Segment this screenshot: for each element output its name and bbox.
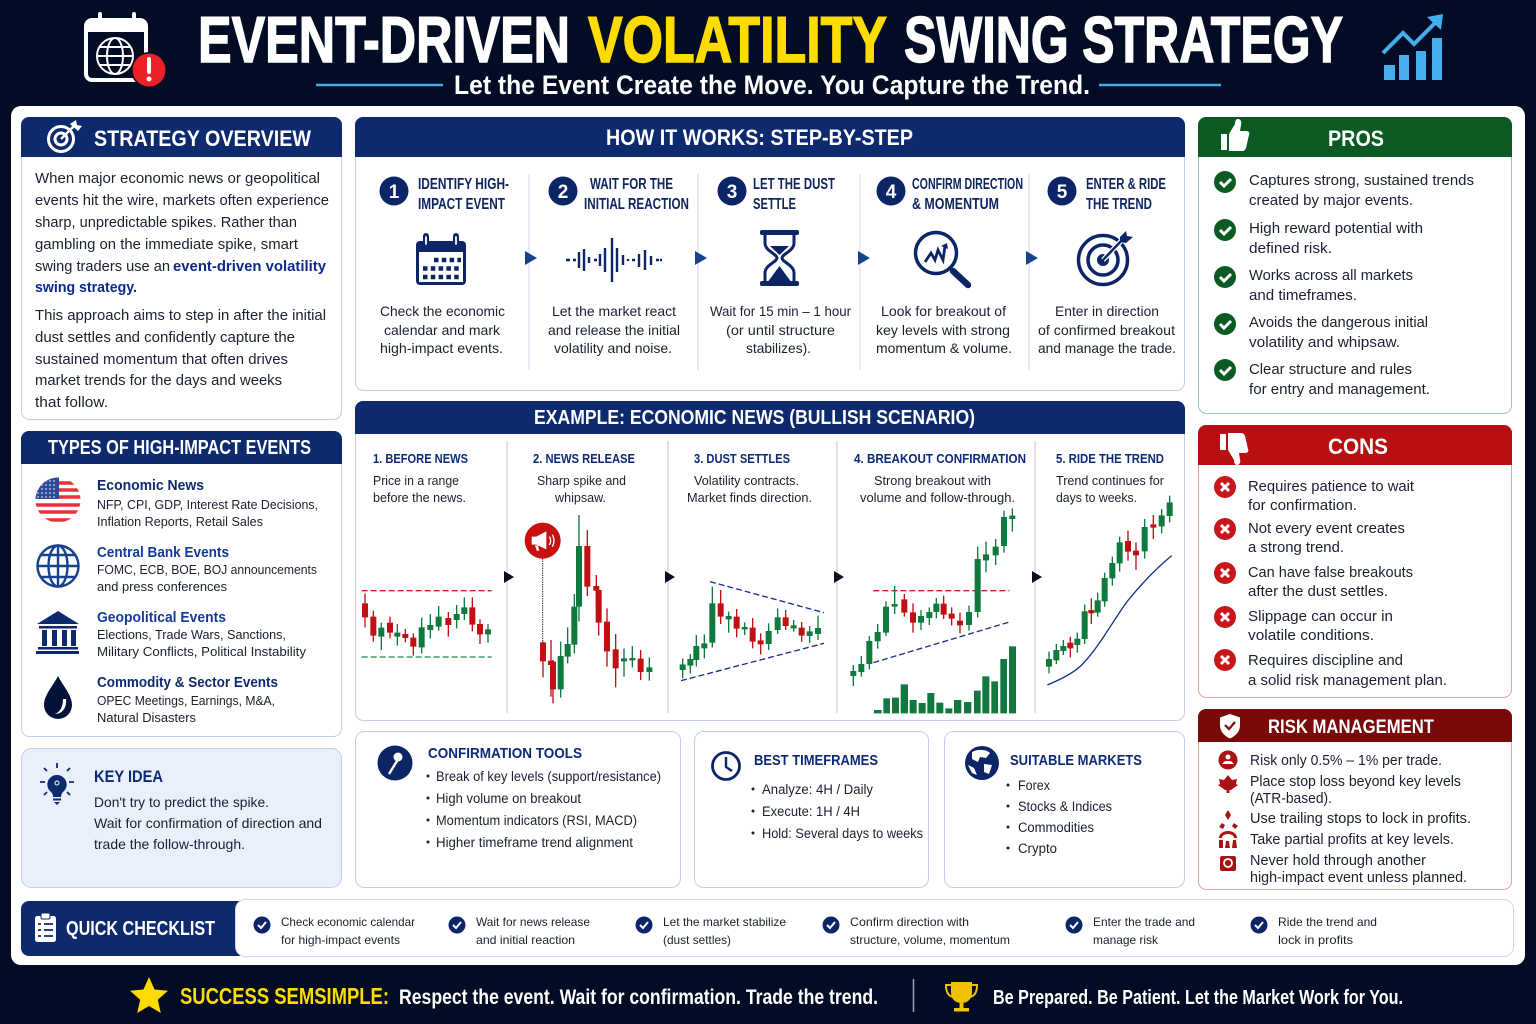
stage 3: 3. DUST SETTLES <box>694 452 790 466</box>
overview text: sustained momentum that often drives <box>35 351 288 368</box>
overview text: dust settles and confidently capture the <box>35 329 295 346</box>
list: Stocks & Indices <box>1018 799 1112 814</box>
pros checks <box>1214 171 1236 381</box>
list <box>752 782 923 841</box>
checklist items: Let the market stabilize <box>663 915 786 929</box>
item: economic news: NFP, CPI, GDP, Interest Rate Decisions, <box>97 498 318 512</box>
key idea text: trade the follow-through. <box>94 836 245 852</box>
stage 5: days to weeks. <box>1056 491 1137 505</box>
icon: oil drop <box>44 676 72 719</box>
title: EVENT-DRIVEN <box>198 3 570 76</box>
stage 2 <box>525 452 649 703</box>
cons list: Not every event creates <box>1248 520 1405 537</box>
cons list: Requires discipline and <box>1248 652 1403 669</box>
risk list: Use trailing stops to lock in profits. <box>1250 811 1471 827</box>
volume bars <box>874 646 1016 713</box>
list: Crypto <box>1018 841 1057 856</box>
list <box>426 769 661 850</box>
heading: RISK MANAGEMENT <box>1268 716 1434 738</box>
checklist items: and initial reaction <box>476 933 575 947</box>
arrow <box>695 251 707 265</box>
stage 2: 2. NEWS RELEASE <box>533 452 635 466</box>
closing message: Be Prepared. Be Patient. Let the Market Work for You. <box>993 987 1403 1009</box>
item: commodity and sector events: Commodity & Sector Events <box>97 675 278 691</box>
item: commodity and sector events: Natural Disasters <box>97 711 196 725</box>
step 1: high-impact events. <box>380 340 503 356</box>
overview text: events hit the wire, markets often experience <box>35 192 329 209</box>
checklist items <box>281 915 1377 947</box>
risk list: Take partial profits at key levels. <box>1250 832 1454 848</box>
icon: globe <box>38 545 78 586</box>
step 2: INITIAL REACTION <box>584 196 689 213</box>
icon: target <box>48 120 82 152</box>
panel: confirmation tools <box>356 732 680 888</box>
icon: star <box>130 977 168 1013</box>
subtitle: Let the Event Create the Move. You Capture the Trend. <box>454 70 1090 100</box>
candlestick chart: range <box>362 591 492 657</box>
stage 2: Sharp spike and <box>537 474 626 488</box>
panel: quick checklist <box>21 900 1514 956</box>
overview text: market trends for the days and weeks <box>35 372 282 389</box>
risk list: Risk only 0.5% – 1% per trade. <box>1250 753 1442 769</box>
item: central bank events: and press conferences <box>97 580 227 594</box>
overview text <box>35 170 329 411</box>
icon: trophy <box>946 982 977 1012</box>
overview text: gambling on the immediate spike, smart <box>35 236 299 253</box>
pros list <box>1249 172 1474 398</box>
risk icons <box>1218 750 1238 871</box>
arrow <box>665 571 675 583</box>
pros list: Works across all markets <box>1249 267 1413 284</box>
step 2: WAIT FOR THE <box>590 176 673 193</box>
item: economic news: Economic News <box>97 478 204 494</box>
list: Higher timeframe trend alignment <box>436 835 633 850</box>
item: central bank events: FOMC, ECB, BOE, BOJ announcements <box>97 563 317 577</box>
stage 1: Price in a range <box>373 474 459 488</box>
cons list: volatile conditions. <box>1248 627 1374 644</box>
step 1: IMPACT EVENT <box>418 196 505 213</box>
step 4: key levels with strong <box>876 322 1010 338</box>
cons marks <box>1214 476 1236 671</box>
cons list: Slippage can occur in <box>1248 608 1393 625</box>
step 3: 3 <box>727 182 737 203</box>
panel: key idea <box>22 748 342 888</box>
success message: Respect the event. Wait for confirmation. Trade the trend. <box>399 986 878 1009</box>
stage 5: Trend continues for <box>1056 474 1164 488</box>
icon: us flag <box>35 477 81 523</box>
cons list: a strong trend. <box>1248 539 1344 556</box>
heading: CONFIRMATION TOOLS <box>428 745 582 762</box>
stage 1: before the news. <box>373 491 466 505</box>
heading: BEST TIMEFRAMES <box>754 752 878 769</box>
pros list: High reward potential with <box>1249 220 1423 237</box>
overview text: swing traders use an <box>35 258 170 275</box>
checklist items: lock in profits <box>1278 933 1353 947</box>
icon: hourglass <box>760 230 799 286</box>
step 2 <box>548 176 689 356</box>
icon: thumbs down <box>1220 433 1248 465</box>
cons list: a solid risk management plan. <box>1248 672 1447 689</box>
step 2: Let the market react <box>552 303 676 319</box>
pros list: created by major events. <box>1249 192 1413 209</box>
arrow <box>1032 571 1042 583</box>
list: High volume on breakout <box>436 791 581 806</box>
item: central bank events: Central Bank Events <box>97 545 229 561</box>
step 2: 2 <box>558 182 568 203</box>
step 3 <box>710 176 851 356</box>
item: geopolitical events <box>97 610 307 659</box>
pros list: Avoids the dangerous initial <box>1249 314 1428 331</box>
checklist items: manage risk <box>1093 933 1159 947</box>
heading: KEY IDEA <box>94 768 163 786</box>
list: Execute: 1H / 4H <box>762 804 860 819</box>
key idea text <box>94 794 322 852</box>
overview text: event-driven volatility <box>173 258 327 275</box>
step 5: THE TREND <box>1086 196 1152 213</box>
icon: thumbs up <box>1221 119 1249 151</box>
icon: pointer badge <box>378 746 412 780</box>
panel: pros <box>1198 117 1512 414</box>
checklist items: (dust settles) <box>663 933 731 947</box>
step 1: IDENTIFY HIGH- <box>418 176 509 193</box>
step 5: of confirmed breakout <box>1038 322 1175 338</box>
step 1: 1 <box>389 182 400 203</box>
risk list: high-impact event unless planned. <box>1250 870 1467 886</box>
pros list: for entry and management. <box>1249 381 1430 398</box>
heading: CONS <box>1328 434 1388 459</box>
step 3: Wait for 15 min – 1 hour <box>710 303 851 319</box>
icon: target with arrow <box>1078 231 1133 284</box>
checklist items: for high-impact events <box>281 933 400 947</box>
panel: types of high-impact events <box>21 431 342 736</box>
stage 4: 4. BREAKOUT CONFIRMATION <box>854 452 1026 466</box>
success message <box>180 983 878 1009</box>
icon: calendar <box>416 236 466 285</box>
heading: PROS <box>1328 126 1384 151</box>
stage 3: Market finds direction. <box>687 491 812 505</box>
step 4 <box>876 176 1023 356</box>
stage 2: whipsaw. <box>554 491 606 505</box>
step 5: Enter in direction <box>1055 303 1159 319</box>
step 3: SETTLE <box>753 196 796 213</box>
footer <box>130 977 1403 1013</box>
panel: how it works <box>355 117 1185 390</box>
step 4: CONFIRM DIRECTION <box>912 176 1023 193</box>
heading: SUITABLE MARKETS <box>1010 752 1142 769</box>
checklist items: structure, volume, momentum <box>850 933 1010 947</box>
checklist marks <box>254 916 1268 934</box>
panel: best timeframes <box>694 732 928 888</box>
pros list: and timeframes. <box>1249 287 1357 304</box>
checklist items: Enter the trade and <box>1093 915 1195 929</box>
header banner <box>86 3 1443 100</box>
cons list: Can have false breakouts <box>1248 564 1413 581</box>
step 4: & MOMENTUM <box>912 196 999 213</box>
success message: SUCCESS SEMSIMPLE: <box>180 983 389 1009</box>
step 3: (or until structure <box>726 322 835 338</box>
panel: bullish scenario example <box>355 401 1185 720</box>
heading: STRATEGY OVERVIEW <box>94 126 311 151</box>
heading: EXAMPLE: ECONOMIC NEWS (BULLISH SCENARIO) <box>534 407 975 429</box>
risk list: Place stop loss beyond key levels <box>1250 774 1461 790</box>
list: Analyze: 4H / Daily <box>762 782 873 797</box>
icon: sound wave <box>566 238 662 282</box>
candlestick chart with volume <box>853 508 1016 713</box>
pros list: Captures strong, sustained trends <box>1249 172 1474 189</box>
risk list <box>1250 753 1471 886</box>
arrow <box>858 251 870 265</box>
step 4: 4 <box>886 182 897 203</box>
arrow <box>1026 251 1038 265</box>
panel: cons <box>1198 425 1512 698</box>
heading: HOW IT WORKS: STEP-BY-STEP <box>606 125 913 150</box>
candlestick chart: uptrend with moving average <box>1047 496 1172 685</box>
stage 4 <box>853 452 1026 713</box>
overview text: swing strategy. <box>35 279 137 296</box>
step 3: stabilizes). <box>746 340 811 356</box>
pros list: defined risk. <box>1249 240 1332 257</box>
icon: clipboard <box>35 913 56 942</box>
risk list: (ATR-based). <box>1250 791 1332 807</box>
stage 5 <box>1047 452 1172 685</box>
title <box>198 3 1343 76</box>
icon: globe badge <box>965 746 999 780</box>
list: Forex <box>1018 778 1050 793</box>
panel: risk management <box>1198 709 1512 890</box>
list: Break of key levels (support/resistance) <box>436 769 661 784</box>
title: SWING STRATEGY <box>904 3 1343 76</box>
overview text: When major economic news or geopolitical <box>35 170 320 187</box>
icon: light bulb <box>40 763 74 805</box>
step 1 <box>380 176 509 356</box>
stage 1: 1. BEFORE NEWS <box>373 452 468 466</box>
item: commodity and sector events <box>97 675 278 725</box>
step 5 <box>1038 176 1176 356</box>
step 1: Check the economic <box>380 303 505 319</box>
cons list: after the dust settles. <box>1248 583 1388 600</box>
checklist items: Confirm direction with <box>850 915 969 929</box>
item: commodity and sector events: OPEC Meetings, Earnings, M&A, <box>97 694 275 708</box>
candlestick chart: triangle consolidation <box>681 582 824 681</box>
item: geopolitical events: Geopolitical Events <box>97 610 226 626</box>
icon: shield <box>1220 714 1240 738</box>
list: Momentum indicators (RSI, MACD) <box>436 813 637 828</box>
overview text: that follow. <box>35 394 108 411</box>
cons list: for confirmation. <box>1248 497 1357 514</box>
stage 3 <box>681 452 824 681</box>
icon: megaphone badge <box>525 523 561 559</box>
candlestick chart: spike and whipsaw <box>525 515 649 703</box>
step 2: volatility and noise. <box>554 340 672 356</box>
heading: TYPES OF HIGH-IMPACT EVENTS <box>48 437 311 459</box>
title: VOLATILITY <box>588 3 887 76</box>
item: economic news: Inflation Reports, Retail Sales <box>97 515 263 529</box>
stage 4: Strong breakout with <box>874 474 991 488</box>
item: geopolitical events: Military Conflicts, Political Instability <box>97 645 307 659</box>
list: Commodities <box>1018 820 1094 835</box>
list: Hold: Several days to weeks <box>762 826 923 841</box>
stage 1 <box>362 452 492 657</box>
icon: rising bar chart <box>1383 14 1443 80</box>
checklist items: Wait for news release <box>476 915 590 929</box>
item: economic news <box>97 478 318 529</box>
heading: QUICK CHECKLIST <box>66 918 215 940</box>
step 5: ENTER & RIDE <box>1086 176 1166 193</box>
cons list: Requires patience to wait <box>1248 478 1415 495</box>
icon: clock <box>712 752 740 780</box>
risk list: Never hold through another <box>1250 853 1426 869</box>
stage 4: volume and follow-through. <box>860 491 1015 505</box>
arrow <box>834 571 844 583</box>
stage 3: Volatility contracts. <box>694 474 799 488</box>
arrow <box>525 251 537 265</box>
key idea text: Wait for confirmation of direction and <box>94 815 322 831</box>
cons list <box>1248 478 1447 689</box>
step 5: 5 <box>1057 182 1068 203</box>
icon: calendar with globe and alert <box>86 14 167 88</box>
list <box>1006 778 1112 856</box>
step 4: momentum & volume. <box>876 340 1012 356</box>
item: central bank events <box>97 545 317 594</box>
item: geopolitical events: Elections, Trade Wars, Sanctions, <box>97 628 286 642</box>
step 5: and manage the trade. <box>1038 340 1176 356</box>
stage 5: 5. RIDE THE TREND <box>1056 452 1164 466</box>
step 3: LET THE DUST <box>753 176 835 193</box>
pros list: volatility and whipsaw. <box>1249 334 1400 351</box>
step 2: and release the initial <box>548 322 680 338</box>
pros list: Clear structure and rules <box>1249 361 1412 378</box>
panel: strategy overview <box>21 117 342 420</box>
icon: magnifier with chart <box>916 232 968 285</box>
key idea text: Don't try to predict the spike. <box>94 794 269 810</box>
icon: government building <box>36 611 79 654</box>
checklist items: Check economic calendar <box>281 915 415 929</box>
panel: suitable markets <box>944 732 1184 888</box>
step 1: calendar and mark <box>384 322 501 338</box>
overview text: This approach aims to step in after the initial <box>35 307 326 324</box>
arrow <box>504 571 514 583</box>
overview text: sharp, unpredictable spikes. Rather than <box>35 214 297 231</box>
checklist items: Ride the trend and <box>1278 915 1377 929</box>
step 4: Look for breakout of <box>881 303 1006 319</box>
